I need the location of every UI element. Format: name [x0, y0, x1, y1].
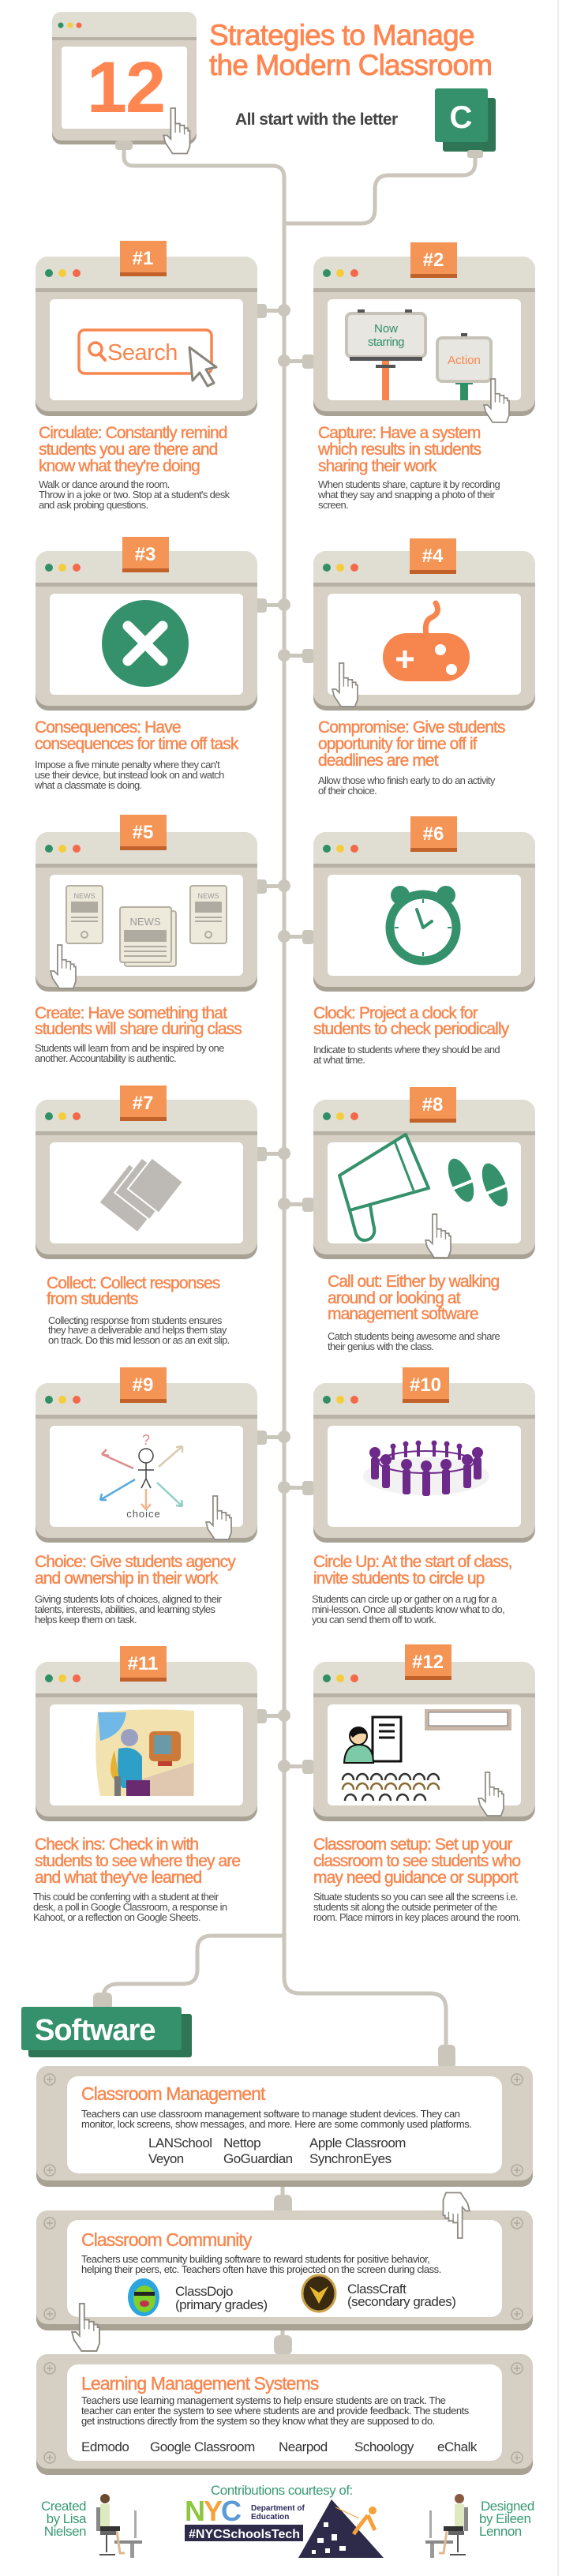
tag #5 [120, 815, 167, 850]
header: 12 window: 12 [87, 47, 164, 128]
icon: billboards: Now [374, 322, 398, 336]
icon: hand cursor #2 [484, 379, 509, 422]
panel: Classroom Management: Classroom Management [81, 2083, 266, 2104]
icon: news tablets: NEWS [74, 892, 95, 900]
text: #2 Capture: sharing their work [318, 457, 437, 475]
icon: news tablets: NEWS [197, 892, 219, 900]
connectors to panels [255, 304, 314, 1774]
icon: gamepad [383, 603, 470, 681]
icon: alarm clock [390, 886, 456, 961]
icon: paper stack [99, 1149, 183, 1236]
text: #6 Clock [313, 1004, 510, 1066]
text: #6 Clock: Clock: Project a clock for [313, 1004, 478, 1022]
panel: Learning Management Systems [36, 2335, 533, 2475]
text: #4 Compromise [318, 718, 505, 797]
icon: choice doodle: choice [126, 1508, 161, 1520]
footer: contributions: Contributions courtesy of: [211, 2483, 353, 2498]
icon: person at desk right [425, 2494, 468, 2558]
tag #3: #3 [135, 544, 155, 565]
panel: Classroom Management [36, 2045, 533, 2187]
text: #3 Consequences: Consequences: Have [35, 718, 181, 737]
tag #6: #6 [423, 823, 444, 845]
panel: Learning Management Systems: teacher can enter the system to see where students are and provide feedback. The students [81, 2405, 470, 2417]
panel: Classroom Management: Teachers can use classroom management software to manage student devices. They can [81, 2108, 460, 2120]
tag #8 [410, 1087, 456, 1123]
text: #10 Circle Up [312, 1553, 512, 1625]
panel #2 [313, 242, 535, 416]
tag #9 [120, 1367, 167, 1403]
footer: designed by: Lennon [479, 2524, 522, 2539]
panel: Classroom Community: ClassDojo [175, 2284, 233, 2299]
text: #10 Circle Up: Circle Up: At the start of class, [313, 1553, 512, 1571]
text: #12 Classroom setup: Classroom setup: Set up your [313, 1835, 512, 1854]
text: #10 Circle Up: Students can circle up or gather on a rug for a [312, 1593, 497, 1605]
text: #11 Check ins: desk, a poll in Google Classroom, a response in [33, 1901, 227, 1913]
panel #9 [36, 1367, 257, 1543]
icon: student at computer [96, 1709, 194, 1796]
text: #1 Circulate: Throw in a joke or two. Stop at a student's desk [39, 489, 230, 501]
panel #12 [313, 1644, 535, 1821]
panel: Learning Management Systems: Schoology [354, 2439, 414, 2454]
text: #4 Compromise: deadlines are met [318, 752, 439, 770]
text: #7 Collect: they have a deliverable and helps them stay [48, 1324, 227, 1336]
text: #9 Choice: talents, interests, abilities, and learning styles [35, 1603, 216, 1615]
text: #10 Circle Up: mini-lesson. Once all students know what to do, [312, 1603, 504, 1615]
text: #11 Check ins: Kahoot, or a reflection on Google Sheets. [33, 1911, 200, 1923]
panel: Classroom Management: Nettop [223, 2135, 260, 2150]
text: #1 Circulate: Walk or dance around the room. [39, 478, 170, 490]
panel #8 [313, 1087, 535, 1259]
panel: Classroom Management: Veyon [148, 2151, 184, 2166]
icon: choice doodle [100, 1432, 182, 1520]
text: #5 Create: another. Accountability is authentic. [35, 1052, 176, 1064]
text: #8 Call out: management software [328, 1305, 478, 1323]
text: #5 Create [35, 1004, 242, 1064]
text: #12 Classroom setup: may need guidance or support [313, 1869, 519, 1887]
icon: search box: Search [107, 340, 178, 366]
icon: hand cursor #12 [478, 1772, 504, 1816]
icon: hand cursor #8 [425, 1214, 451, 1258]
text: #8 Call out [328, 1273, 500, 1352]
icon: choice doodle: ? [142, 1432, 150, 1448]
letter C box [435, 88, 496, 158]
tag #5: #5 [133, 822, 153, 843]
tag #3 [122, 537, 169, 572]
icon: purple circle of people [363, 1440, 489, 1496]
software heading [21, 1993, 192, 2057]
panel #7 [36, 1086, 257, 1259]
text: #3 Consequences: use their device, but instead look on and watch [35, 769, 224, 781]
panel: Classroom Community: (primary grades) [175, 2297, 268, 2312]
icon: billboards: starring [368, 336, 404, 349]
icon: hand cursor pointing down [444, 2193, 470, 2238]
text: #11 Check ins: This could be conferring with a student at their [33, 1891, 219, 1903]
tag #12: #12 [412, 1652, 444, 1673]
icon: hand cursor #9 [206, 1496, 231, 1539]
panel: Classroom Community: Classroom Community [81, 2229, 253, 2250]
panel #6 [313, 816, 535, 992]
tag #6 [410, 816, 457, 852]
text: #7 Collect [47, 1274, 230, 1346]
text: #11 Check ins: Check ins: Check in with [35, 1835, 198, 1854]
panel: Classroom Management: Apple Classroom [309, 2135, 406, 2150]
panel: Classroom Community: helping their peers, etc. Teachers often have this projected on the screen during class. [81, 2263, 441, 2275]
text: #12 Classroom setup: classroom to see students who [313, 1852, 520, 1870]
text: #3 Consequences [34, 718, 239, 791]
panel: Classroom Community: ClassCraft [347, 2282, 407, 2297]
text: #4 Compromise: Allow those who finish early to do an activity [318, 774, 496, 786]
icon: ClassDojo [128, 2278, 159, 2316]
text: #11 Check ins: students to see where they are [35, 1852, 240, 1870]
footer: designed by: by Eileen [479, 2511, 530, 2526]
footer: NYC DOE logo: NYC [185, 2495, 242, 2527]
tag #10: #10 [410, 1374, 441, 1396]
text: #6 Clock: at what time. [313, 1054, 365, 1066]
text: #9 Choice: Giving students lots of choices, aligned to their [35, 1593, 223, 1605]
text: #12 Classroom setup: room. Place mirrors in key places around the room. [313, 1911, 520, 1923]
tag #10 [403, 1367, 449, 1403]
icon: header hand cursor [163, 108, 189, 153]
tag #2: #2 [423, 249, 444, 271]
letter C box: C [450, 100, 472, 135]
text: #5 Create: Create: Have something that [35, 1004, 227, 1022]
panel: Learning Management Systems: Learning Management Systems [81, 2373, 319, 2394]
panel #5 [36, 815, 257, 992]
panel: Learning Management Systems: get instructions directly from the system so they know what they are supposed to do. [81, 2415, 435, 2427]
icon: classroom setup [343, 1709, 511, 1801]
panel #4 [313, 538, 535, 711]
footer: created by: by Lisa [47, 2511, 87, 2526]
panel: Classroom Management: monitor, lock screens, show messages, and more. Here are some commonly used platforms. [81, 2118, 472, 2130]
text: #6 Clock: Indicate to students where they should be and [313, 1044, 500, 1056]
tag #11 [120, 1646, 167, 1682]
panel: Learning Management Systems: Google Classroom [150, 2439, 255, 2454]
icon: hand cursor software [72, 2304, 99, 2351]
panel #11 [36, 1646, 257, 1821]
text: #7 Collect: on track. Do this mid lesson or as an exit slip. [48, 1334, 230, 1346]
panel: Learning Management Systems: Teachers use learning management systems to help ensure students are on track. The [81, 2394, 446, 2406]
text: #1 Circulate [39, 424, 230, 511]
tag #4 [410, 538, 456, 574]
text: #5 Create: students will share during class [35, 1020, 242, 1038]
footer: created by [41, 2499, 87, 2539]
text: #9 Choice: and ownership in their work [35, 1569, 219, 1588]
text: #3 Consequences: Impose a five minute penalty where they can't [35, 759, 220, 771]
tag #12 [405, 1644, 451, 1680]
text: #10 Circle Up: you can send them off to work. [312, 1614, 436, 1625]
tag #4: #4 [422, 546, 444, 567]
tag #7: #7 [133, 1093, 153, 1114]
icon: billboards: Action [448, 354, 481, 367]
text: #4 Compromise: of their choice. [318, 785, 377, 797]
icon: news tablets: NEWS [129, 916, 161, 928]
title: Strategies to Manage [209, 19, 474, 51]
tag #2 [410, 242, 457, 278]
text: #9 Choice [35, 1553, 236, 1625]
text: #1 Circulate: and ask probing questions. [39, 499, 148, 511]
footer: NYC DOE logo [185, 2495, 384, 2558]
panel: Classroom Community: Teachers use community building software to reward students for positive behavior, [81, 2253, 429, 2265]
footer: designed by: Designed [481, 2499, 534, 2514]
tag #7 [120, 1086, 167, 1121]
icon: hand cursor #4 [332, 663, 358, 707]
text: #2 Capture: which results in students [317, 441, 481, 459]
icon: news tablets [66, 886, 227, 966]
text: #11 Check ins: and what they've learned [35, 1869, 201, 1887]
text: #1 Circulate: know what they're doing [39, 457, 200, 475]
panel: Learning Management Systems: eChalk [437, 2439, 478, 2454]
text: #7 Collect: Collecting response from students ensures [48, 1314, 223, 1326]
header: 12 window [52, 12, 197, 150]
text: #12 Classroom setup: students sit along the outside perimeter of the [313, 1901, 497, 1913]
text: #8 Call out: their genius with the class. [328, 1340, 433, 1352]
icon: search box [79, 330, 216, 386]
text: #9 Choice: Choice: Give students agency [35, 1553, 236, 1571]
panel: Classroom Community [36, 2195, 533, 2330]
text: #2 Capture [317, 424, 500, 511]
text: #2 Capture: Capture: Have a system [318, 424, 481, 442]
software heading: Software [35, 2014, 155, 2047]
text: #3 Consequences: what a classmate is doing. [34, 779, 142, 791]
footer: NYC DOE logo: #NYCSchoolsTech [189, 2528, 300, 2541]
text: #8 Call out: Call out: Either by walking [328, 1273, 500, 1291]
text: #3 Consequences: consequences for time off task [35, 735, 239, 753]
text: #7 Collect: from students [47, 1290, 138, 1308]
icon: megaphone and footprints [339, 1134, 514, 1240]
footer: NYC DOE logo: Department of [251, 2504, 305, 2513]
text: #2 Capture: screen. [318, 499, 348, 511]
icon: hand cursor #5 [51, 945, 76, 988]
text: #8 Call out: Catch students being awesome and share [328, 1330, 500, 1342]
text: #2 Capture: what they say and snapping a photo of their [317, 489, 496, 501]
footer: NYC DOE logo: Education [251, 2513, 289, 2522]
panel: Learning Management Systems: Nearpod [279, 2439, 328, 2454]
tag #9: #9 [133, 1374, 153, 1396]
text: #5 Create: Students will learn from and be inspired by one [35, 1042, 224, 1054]
tag #1: #1 [133, 248, 153, 269]
tag #1 [120, 241, 167, 276]
text: #11 Check ins [33, 1835, 240, 1923]
panel: Classroom Management: LANSchool [148, 2135, 212, 2150]
footer: created by: Created [41, 2499, 86, 2514]
panel: Classroom Management: GoGuardian [223, 2151, 293, 2166]
footer: created by: Nielsen [44, 2524, 86, 2539]
text: #1 Circulate: students you are there and [39, 441, 218, 459]
subtitle: All start with the letter [235, 111, 398, 129]
panel: Classroom Management: SynchronEyes [309, 2151, 392, 2166]
text: #10 Circle Up: invite students to circle up [313, 1569, 485, 1588]
text: #1 Circulate: Circulate: Constantly remind [39, 424, 227, 442]
icon: billboards [347, 309, 491, 400]
text: #6 Clock: students to check periodically [313, 1020, 510, 1038]
tag #8: #8 [422, 1094, 443, 1116]
panel: Learning Management Systems: Edmodo [81, 2439, 129, 2454]
icon: ClassCraft [302, 2275, 335, 2312]
panel #10 [313, 1367, 535, 1543]
panel: Classroom Community: (secondary grades) [347, 2294, 455, 2309]
text: #12 Classroom setup [313, 1835, 520, 1923]
panel #1 [36, 241, 257, 416]
icon: person at desk left [96, 2494, 142, 2558]
tag #11: #11 [128, 1653, 158, 1674]
footer: designed by [479, 2499, 534, 2539]
text: #4 Compromise: Compromise: Give students [318, 718, 505, 737]
panel #3 [36, 537, 257, 711]
text: #4 Compromise: opportunity for time off if [318, 735, 478, 753]
title: the Modern Classroom [209, 49, 492, 81]
text: #12 Classroom setup: Situate students so you can see all the screens i.e. [313, 1891, 518, 1903]
cables [103, 146, 475, 2341]
text: #2 Capture: When students share, capture it by recording [318, 478, 500, 490]
icon: green X circle [102, 600, 189, 687]
title [209, 19, 492, 81]
text: #7 Collect: Collect: Collect responses [47, 1274, 220, 1292]
text: #8 Call out: around or looking at [328, 1289, 461, 1307]
text: #9 Choice: helps keep them on task. [35, 1614, 137, 1625]
